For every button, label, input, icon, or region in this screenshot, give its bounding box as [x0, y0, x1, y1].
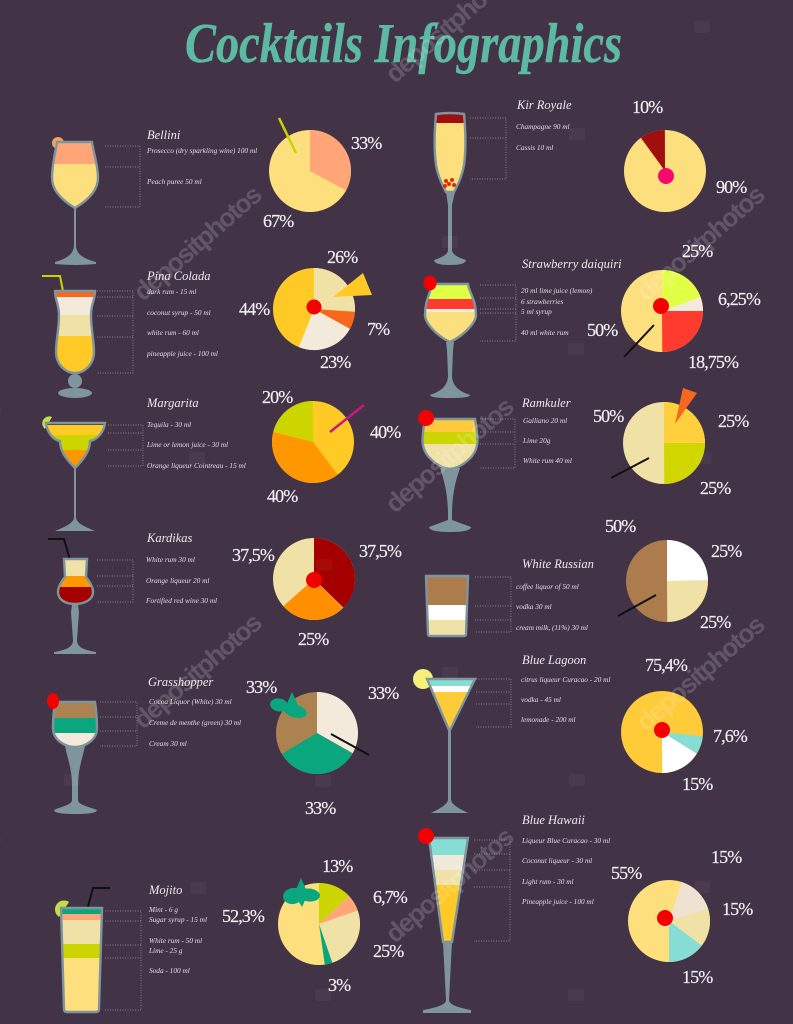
- ingredients: Pina Colada: pineapple juice - 100 ml: [146, 349, 218, 358]
- heading: Blue Lagoon: Blue Lagoon: [522, 653, 586, 667]
- percent labels: Bellini: 67%: [263, 211, 294, 231]
- ingredients: Mojito: Lime - 25 g: [148, 946, 183, 955]
- pie chart: Blue Hawaii: [628, 880, 710, 962]
- ingredients: Kir Royale: Cassis 10 ml: [516, 143, 553, 152]
- pie chart: Grasshopper: [269, 692, 369, 774]
- percent labels: Kardikas: 25%: [298, 629, 329, 649]
- pie chart: Margarita: [272, 401, 364, 483]
- ingredients: White Russian: coffee liquor of 50 ml: [516, 582, 579, 591]
- ingredients: Grasshopper: Cocoa Liquor (White) 30 ml: [149, 697, 232, 706]
- ingredients: Blue Lagoon: [521, 675, 610, 724]
- percent labels: Margarita: 20%: [262, 387, 293, 407]
- icon: Bellini glass: [50, 137, 100, 265]
- percent labels: Kir Royale: [632, 97, 747, 197]
- percent labels: Blue Lagoon: [645, 655, 748, 794]
- panel: Mojito: [55, 856, 408, 1012]
- percent labels: Mojito: 13%: [322, 856, 353, 876]
- ingredients: Blue Lagoon: vodka - 45 ml: [521, 695, 561, 704]
- ingredients: White Russian: [516, 582, 588, 632]
- ingredients: Margarita: Orange liqueur Cointreau - 15 ml: [147, 461, 246, 470]
- panel: Blue Lagoon: [413, 653, 748, 813]
- percent labels: Ramkuler: 25%: [718, 411, 749, 431]
- ingredients: Kardikas: White rum 30 ml: [146, 555, 195, 564]
- ingredients: Mojito: Sugar syrup - 15 ml: [149, 915, 207, 924]
- icon: Blue Hawaii glass: [418, 828, 471, 1013]
- ingredients: Blue Hawaii: Pineapple juice - 100 ml: [521, 897, 594, 906]
- percent labels: Mojito: [222, 856, 408, 995]
- ingredients: Mojito: [148, 905, 207, 975]
- heading: Kir Royale: Kir Royale: [516, 98, 572, 112]
- percent labels: Blue Lagoon: 15%: [682, 774, 713, 794]
- percent labels: Strawberry daiquiri: 6,25%: [718, 289, 761, 309]
- heading: Kardikas: Kardikas: [146, 531, 193, 545]
- icon: Strawberry daiquiri glass: [420, 276, 480, 398]
- pie chart: Blue Lagoon: [621, 691, 703, 773]
- panel: Kardikas: [48, 531, 402, 654]
- ingredients: Margarita: Lime or lemon juice - 30 ml: [146, 440, 228, 449]
- percent labels: Strawberry daiquiri: 50%: [587, 320, 618, 340]
- watermarks: depositphotos: [127, 607, 268, 735]
- percent labels: Pina Colada: 26%: [327, 247, 358, 267]
- percent labels: Mojito: 6,7%: [373, 887, 408, 907]
- watermarks: depositphotos: [630, 179, 771, 307]
- ingredients: Kir Royale: [516, 122, 570, 152]
- percent labels: White Russian: 25%: [711, 541, 742, 561]
- panel: Bellini: [50, 118, 382, 265]
- percent labels: White Russian: [605, 516, 742, 632]
- ingredients: Margarita: Tequila - 30 ml: [147, 420, 191, 429]
- ingredients: Ramkuler: Galliano 20 ml: [523, 416, 567, 425]
- ingredients: Strawberry daiquiri: 20 ml lime juice (lemon): [521, 286, 593, 295]
- ingredients: Grasshopper: Creme de menthe (green) 30 ml: [149, 718, 241, 727]
- ingredients: Blue Hawaii: [521, 836, 610, 906]
- watermarks: depositphotos: [630, 609, 771, 737]
- ingredients: Bellini: Prosecco (dry sparkling wine) 100 ml: [146, 146, 257, 155]
- ingredients: Pina Colada: dark rum - 15 ml: [147, 287, 196, 296]
- ingredients: White Russian: cream milk, (11%) 30 ml: [516, 623, 588, 632]
- heading: Margarita: Margarita: [146, 396, 199, 410]
- pie chart: Kir Royale: [624, 130, 706, 212]
- percent labels: Blue Hawaii: 15%: [711, 847, 742, 867]
- percent labels: Margarita: 40%: [267, 486, 298, 506]
- icon: White Russian glass: [420, 576, 470, 636]
- ingredients: Grasshopper: [149, 697, 241, 748]
- icon: mint leaf: [269, 692, 308, 720]
- icon: Grasshopper glass: [47, 693, 100, 814]
- ingredients: Strawberry daiquiri: 5 ml syrup: [521, 307, 552, 316]
- pie chart: Ramkuler: [611, 388, 705, 484]
- percent labels: Ramkuler: 25%: [700, 478, 731, 498]
- percent labels: Kardikas: 37,5%: [359, 541, 402, 561]
- ingredients: Mojito: White rum - 50 ml: [149, 936, 202, 945]
- ingredients: Blue Hawaii: Coconut liqueur - 30 ml: [522, 856, 592, 865]
- percent labels: White Russian: 50%: [605, 516, 636, 536]
- percent labels: Kir Royale: 10%: [632, 97, 663, 117]
- percent labels: Blue Hawaii: 15%: [722, 899, 753, 919]
- ingredients: Strawberry daiquiri: 40 ml white rum: [521, 328, 569, 337]
- ingredients: Ramkuler: [522, 416, 572, 465]
- panel: Margarita: [40, 387, 401, 531]
- percent labels: Blue Hawaii: 15%: [682, 967, 713, 987]
- icon: Kardikas glass: [48, 539, 96, 654]
- title: Cocktails Infographics: [185, 13, 622, 75]
- heading: Pina Colada: Pina Colada: [146, 269, 211, 283]
- ingredients: White Russian: vodka 30 ml: [516, 602, 552, 611]
- percent labels: White Russian: 25%: [700, 612, 731, 632]
- watermarks: depositphotos: [379, 821, 520, 949]
- percent labels: Grasshopper: [246, 677, 399, 818]
- percent labels: Mojito: 25%: [373, 941, 404, 961]
- icon: Mojito glass: [55, 888, 110, 1012]
- pie chart: Strawberry daiquiri: [621, 270, 703, 357]
- percent labels: Blue Lagoon: 7,6%: [713, 726, 748, 746]
- ingredients: Blue Lagoon: citrus liqueur Curacao - 20 ml: [521, 675, 610, 684]
- ingredients: Mojito: Soda - 100 ml: [149, 966, 190, 975]
- ingredients: Pina Colada: white rum - 60 ml: [147, 328, 199, 337]
- heading: Mojito: Mojito: [148, 883, 182, 897]
- ingredients: Pina Colada: coconut syrup - 50 ml: [147, 308, 211, 317]
- percent labels: Kardikas: 37,5%: [232, 545, 275, 565]
- percent labels: Grasshopper: 33%: [305, 798, 336, 818]
- ingredients: Blue Lagoon: lemonade - 200 ml: [521, 715, 576, 724]
- pie chart: Mojito: [278, 878, 360, 965]
- ingredients: Ramkuler: Lime 20g: [522, 436, 551, 445]
- heading: Ramkuler: Ramkuler: [521, 396, 571, 410]
- icon: Pina Colada glass: [42, 276, 100, 398]
- ingredients: Strawberry daiquiri: [521, 286, 593, 337]
- percent labels: Blue Lagoon: 75,4%: [645, 655, 688, 675]
- percent labels: Kir Royale: 90%: [716, 177, 747, 197]
- panel: Pina Colada: [42, 247, 390, 398]
- percent labels: Kardikas: [232, 541, 402, 649]
- ingredients: Kardikas: Orange liqueur 20 ml: [146, 576, 209, 585]
- icon: Margarita glass: [40, 416, 110, 531]
- icon: mint leaf: [282, 878, 321, 907]
- icon: Ramkuler glass: [418, 410, 480, 532]
- heading: Bellini: Bellini: [147, 128, 181, 142]
- percent labels: Mojito: 3%: [328, 975, 351, 995]
- ingredients: Margarita: [146, 420, 246, 470]
- ingredients: Pina Colada: [146, 287, 218, 358]
- ingredients: Ramkuler: White rum 40 ml: [523, 456, 572, 465]
- panel: White Russian: [420, 516, 742, 636]
- percent labels: Strawberry daiquiri: [587, 241, 761, 372]
- icon: Blue Lagoon glass: [413, 669, 477, 813]
- heading: White Russian: White Russian: [522, 557, 594, 571]
- percent labels: Bellini: [263, 133, 382, 231]
- pie chart: Kardikas: [273, 538, 355, 620]
- percent labels: Pina Colada: 7%: [367, 319, 390, 339]
- heading: Strawberry daiquiri: Strawberry daiquiri: [522, 257, 622, 271]
- percent labels: Ramkuler: [593, 406, 749, 498]
- ingredients: Grasshopper: Cream 30 ml: [149, 739, 187, 748]
- watermarks: depositphotos: [379, 391, 520, 519]
- percent labels: Blue Hawaii: 55%: [611, 863, 642, 883]
- percent labels: Strawberry daiquiri: 18,75%: [688, 352, 739, 372]
- panel: Ramkuler: [418, 388, 749, 532]
- ingredients: Blue Hawaii: Light rum - 30 ml: [521, 877, 574, 886]
- icon: Kir Royale glass: [433, 112, 467, 265]
- pie chart: White Russian: [618, 540, 708, 622]
- panel: Grasshopper: [47, 675, 399, 818]
- percent labels: Mojito: 52,3%: [222, 906, 265, 926]
- panel: Blue Hawaii: [418, 813, 753, 1013]
- percent labels: Bellini: 33%: [351, 133, 382, 153]
- camera marks: [64, 21, 711, 1001]
- ingredients: Strawberry daiquiri: 6 strawberries: [521, 297, 564, 306]
- percent labels: Pina Colada: 44%: [239, 299, 270, 319]
- percent labels: Ramkuler: 50%: [593, 406, 624, 426]
- percent labels: Blue Hawaii: [611, 847, 753, 987]
- panel: Kir Royale: [430, 97, 747, 265]
- percent labels: Margarita: [262, 387, 401, 506]
- watermarks: depositphotos: [127, 179, 268, 307]
- heading: Grasshopper: Grasshopper: [148, 675, 213, 689]
- percent labels: Strawberry daiquiri: 25%: [682, 241, 713, 261]
- ingredients: Kardikas: Fortified red wine 30 ml: [145, 596, 217, 605]
- panel: Strawberry daiquiri: [420, 241, 761, 398]
- ingredients: Mojito: Mint - 6 g: [148, 905, 178, 914]
- heading: Blue Hawaii: Blue Hawaii: [522, 813, 585, 827]
- pie chart: Bellini: [269, 118, 351, 212]
- ingredients: Bellini: [146, 146, 257, 186]
- pie chart: Pina Colada: [273, 268, 372, 350]
- percent labels: Grasshopper: 33%: [368, 683, 399, 703]
- percent labels: Margarita: 40%: [370, 422, 401, 442]
- percent labels: Pina Colada: [239, 247, 390, 372]
- ingredients: Bellini: Peach puree 50 ml: [146, 177, 202, 186]
- percent labels: Pina Colada: 23%: [320, 352, 351, 372]
- ingredients: Kir Royale: Champagne 90 ml: [516, 122, 570, 131]
- ingredients: Kardikas: [145, 555, 217, 605]
- percent labels: Grasshopper: 33%: [246, 677, 277, 697]
- ingredients: Blue Hawaii: Liqueur Blue Curacao - 30 ml: [521, 836, 610, 845]
